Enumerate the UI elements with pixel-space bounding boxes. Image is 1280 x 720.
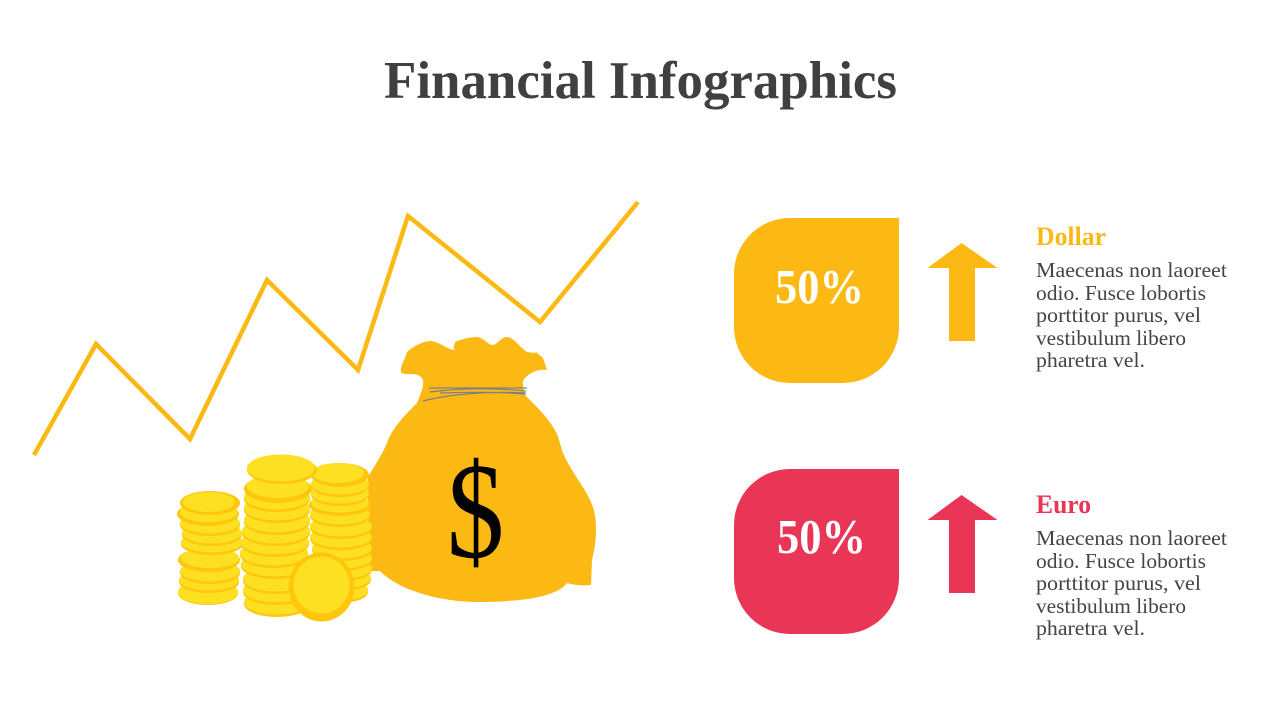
bag string — [423, 388, 527, 401]
value: dollar 50%: 50% — [775, 259, 864, 314]
line chart: rising trend — [34, 202, 638, 455]
heading: dollar: Dollar — [1036, 222, 1106, 251]
value: euro 50%: 50% — [777, 509, 866, 564]
description: dollar: pharetra vel. — [1036, 348, 1145, 372]
icon: coin stack right — [309, 463, 372, 603]
icon: coin stack left — [177, 491, 243, 605]
description: dollar: Maecenas non laoreet — [1036, 258, 1227, 282]
title: Financial Infographics — [384, 52, 897, 110]
arrow: dollar up — [928, 243, 998, 341]
heading: euro: Euro — [1036, 490, 1091, 519]
icon: front coin — [288, 552, 354, 622]
arrow: euro up — [928, 495, 998, 593]
description: euro: pharetra vel. — [1036, 616, 1145, 640]
icon: money bag — [368, 337, 596, 602]
text block: euro — [1036, 490, 1227, 640]
panel: dollar percentage — [734, 218, 899, 383]
dollar sign: $ — [447, 436, 504, 587]
description: euro: vestibulum libero — [1036, 594, 1186, 618]
text block: dollar — [1036, 222, 1227, 372]
icon: coin stack centre — [240, 454, 317, 617]
description: euro: Maecenas non laoreet — [1036, 526, 1227, 550]
description: dollar: odio. Fusce lobortis — [1036, 281, 1206, 305]
description: dollar: porttitor purus, vel — [1036, 303, 1201, 327]
description: dollar: vestibulum libero — [1036, 326, 1186, 350]
panel: euro percentage — [734, 469, 899, 634]
description: euro: porttitor purus, vel — [1036, 571, 1201, 595]
description: euro: odio. Fusce lobortis — [1036, 549, 1206, 573]
description: dollar — [1036, 258, 1227, 372]
description: euro — [1036, 526, 1227, 640]
